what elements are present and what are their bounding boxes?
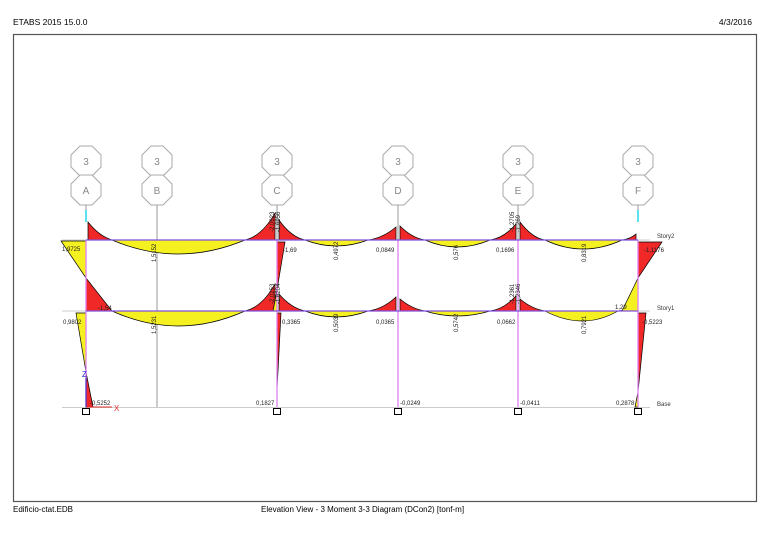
grid bubbles [71, 146, 653, 205]
value labels: -0,5252 [90, 401, 111, 407]
grid bubbles: 3 [83, 157, 89, 168]
value labels: -1,2346 [516, 283, 522, 304]
value labels: -2,0623 [270, 211, 276, 232]
header left: ETABS 2015 15.0.0 [13, 17, 88, 27]
grid bubbles: 3 [635, 157, 641, 168]
supports [82, 408, 642, 414]
value labels: -0,0249 [400, 401, 421, 407]
footer left: Edificio-ctat.EDB [13, 505, 73, 514]
grid bubbles: 3 [515, 157, 521, 168]
value labels: -1,6204 [276, 283, 282, 304]
moment diagrams beams [61, 213, 662, 407]
value labels: -1,1176 [644, 248, 665, 254]
value labels: 0,576 [454, 244, 460, 260]
value labels: 0,0365 [376, 320, 395, 326]
story labels: Story2 [657, 234, 675, 240]
value labels: 0,2878 [616, 401, 635, 407]
grid bubbles: 3 [274, 157, 280, 168]
value labels: -1,54 [98, 306, 112, 312]
grid bubbles: B [154, 186, 161, 197]
grid bubbles: A [83, 186, 90, 197]
value labels: 0,7921 [582, 315, 588, 334]
story labels [657, 234, 675, 408]
story labels: Story1 [657, 306, 675, 312]
value labels [62, 211, 665, 407]
value labels: 0,0849 [376, 248, 395, 254]
grid bubbles: 3 [395, 157, 401, 168]
grid bubbles: 3 [154, 157, 160, 168]
value labels: -1,6956 [276, 211, 282, 232]
value labels: 0,0662 [497, 320, 516, 326]
grid bubbles: E [515, 186, 522, 197]
value labels: -1,2361 [510, 283, 516, 304]
grid bubbles: C [273, 186, 281, 197]
axes: X [114, 404, 120, 413]
value labels: -1,69 [283, 248, 297, 254]
value labels: -1,269 [516, 214, 522, 232]
grid bubbles: D [394, 186, 402, 197]
value labels: -0,5223 [642, 320, 663, 326]
value labels: 1,9725 [62, 247, 81, 253]
value labels: 0,5039 [334, 313, 340, 332]
value labels: 0,3365 [282, 320, 301, 326]
axes [82, 370, 120, 413]
value labels: 1,5152 [152, 243, 158, 262]
value labels: 0,4972 [334, 241, 340, 260]
axes: Z [82, 370, 87, 379]
story labels: Base [657, 402, 671, 408]
frame members [86, 240, 638, 407]
footer caption: Elevation View - 3 Moment 3-3 Diagram (DCon2) [tonf-m] [261, 505, 464, 514]
value labels: 0,9802 [63, 320, 82, 326]
header date: 4/3/2016 [719, 17, 752, 27]
value labels: -1,2705 [510, 211, 516, 232]
value labels: 0,1827 [256, 401, 275, 407]
value labels: 0,5742 [454, 313, 460, 332]
value labels: -0,0411 [520, 401, 541, 407]
grid lines [62, 205, 650, 408]
column diagrams [61, 241, 86, 278]
grid bubbles: F [635, 186, 641, 197]
value labels: 0,8319 [582, 243, 588, 262]
value labels: 0,1696 [496, 248, 515, 254]
value labels: -2,0253 [270, 283, 276, 304]
value labels: 1,5231 [152, 315, 158, 334]
value labels: 1,29 [615, 305, 627, 311]
